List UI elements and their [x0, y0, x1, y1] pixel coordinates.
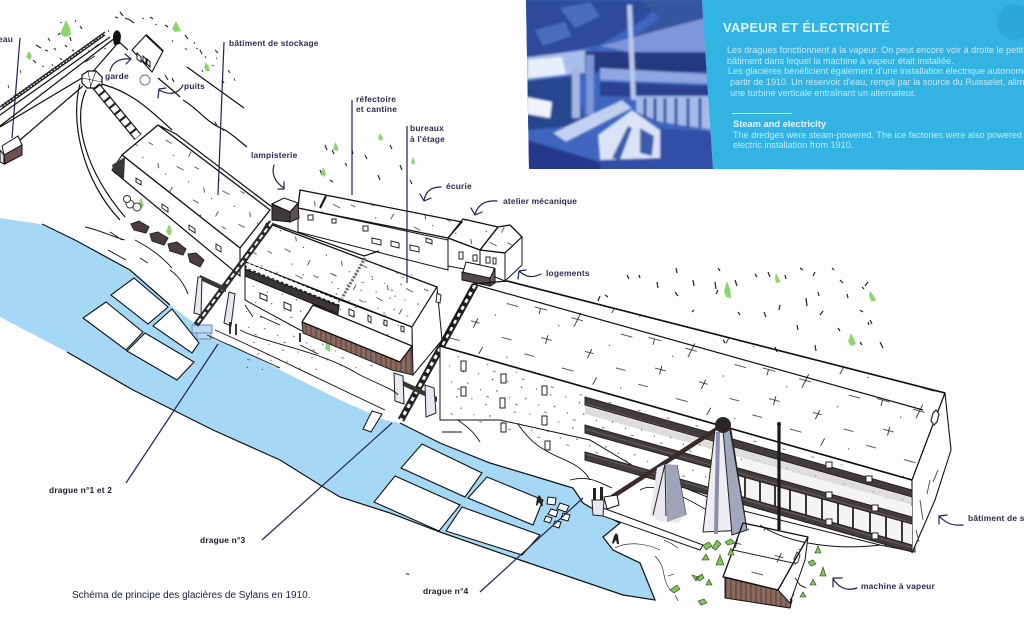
pylons and steam conveyor	[592, 417, 781, 550]
labels: et cantine	[356, 104, 397, 114]
shore foliage near engine house	[615, 539, 826, 605]
floating ice blocks	[192, 325, 570, 528]
dark bands	[585, 397, 912, 497]
conveyor and piers at the dredges	[194, 222, 475, 432]
track to hut	[20, 44, 117, 140]
tunnel entrance	[113, 30, 121, 45]
English text: electric installation from 1910.	[733, 140, 853, 150]
foliage speckles	[8, 12, 883, 352]
French text	[727, 45, 1024, 98]
text panel	[702, 0, 1024, 170]
building: rear workshops	[298, 190, 522, 286]
well	[140, 75, 150, 85]
French text: Les dragues fonctionnent à la vapeur. On peut encore voir à droite le petit	[727, 45, 1024, 55]
carts	[131, 221, 204, 267]
leader lines	[12, 38, 583, 592]
labels: drague n°4	[423, 586, 469, 596]
hut with lower left	[2, 136, 22, 155]
end gable	[412, 287, 442, 375]
labels: à l'étage	[410, 134, 445, 144]
annex	[302, 322, 413, 375]
labels: logements	[546, 268, 590, 278]
labels: drague n°1 et 2	[49, 485, 112, 495]
labels: machine à vapeur	[861, 581, 935, 591]
workers	[405, 495, 619, 575]
labels: réfectoire	[356, 94, 396, 104]
ladder track	[96, 86, 138, 137]
labels: lampisterie	[251, 150, 298, 160]
building: long coal store	[112, 125, 272, 276]
labels: écurie	[446, 181, 472, 191]
inclined rail with fence	[0, 32, 105, 110]
labels: puits	[184, 81, 205, 91]
archival photo	[520, 0, 720, 175]
panel heading: VAPEUR ET ÉLECTRICITÉ	[723, 20, 890, 35]
shore scribbles	[85, 227, 905, 547]
building: main factory	[245, 222, 442, 375]
French text: une turbine verticale entraînant un alternateur.	[730, 88, 916, 98]
French text: bâtiment dans lequel la machine à vapeur était installée.	[727, 56, 953, 66]
logement hut	[462, 262, 494, 285]
labels: atelier mécanique	[503, 196, 577, 206]
windows	[461, 361, 550, 450]
labels: bureaux	[410, 123, 444, 133]
labels: drague n°3	[200, 535, 246, 545]
labels: garde	[105, 71, 129, 81]
river	[0, 218, 655, 600]
gallery windows	[246, 262, 339, 305]
curved label arrows	[110, 54, 963, 589]
labels: bâtiment de stockage	[229, 38, 319, 48]
ice sheets on the river	[83, 278, 543, 555]
green trees	[26, 20, 876, 352]
building: lampisterie hut	[272, 198, 299, 222]
big ice storage building	[440, 281, 951, 553]
steam engine house	[723, 523, 808, 608]
English heading: Steam and electricity	[733, 119, 827, 129]
slope lines	[183, 67, 247, 147]
band pillars	[742, 456, 912, 546]
divider	[732, 113, 792, 114]
hillside tracks and quarry	[0, 30, 247, 220]
octagon	[82, 71, 102, 88]
storage building	[132, 35, 163, 72]
caption: Schéma de principe des glacières de Sylans en 1910.	[72, 590, 310, 601]
jetty	[600, 508, 703, 550]
English text	[733, 130, 1024, 150]
